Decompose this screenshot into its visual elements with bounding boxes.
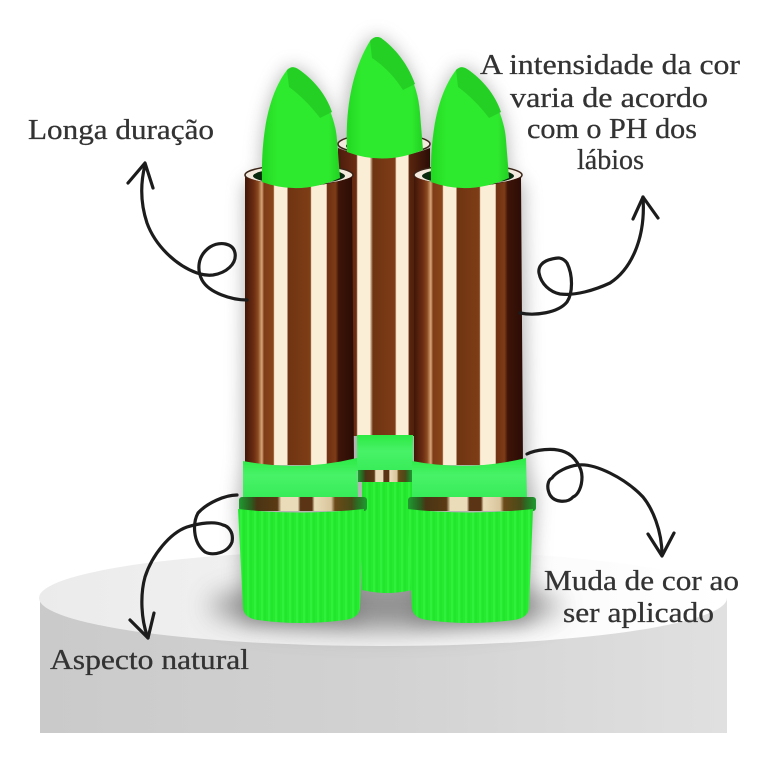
label: long lasting: Longa duração	[28, 114, 214, 146]
label: changes color	[544, 565, 739, 629]
shadow under lipsticks	[210, 37, 560, 630]
lipstick: right	[407, 67, 536, 623]
label: color intensity: varia de acordo	[510, 82, 708, 114]
arrow: color intensity	[520, 197, 658, 314]
label: changes color: Muda de cor ao	[544, 565, 739, 597]
arrow: changes color	[527, 449, 674, 556]
label: color intensity: lábios	[577, 144, 644, 176]
label: changes color: ser aplicado	[563, 597, 714, 629]
arrow: natural look	[130, 495, 237, 638]
pedestal	[39, 550, 727, 733]
label: color intensity: com o PH dos	[527, 113, 697, 145]
lipstick: left	[238, 67, 367, 623]
arrow: long lasting	[128, 163, 247, 300]
lipstick: center	[338, 37, 430, 593]
label: natural look: Aspecto natural	[50, 644, 249, 676]
label: color intensity: A intensidade da cor	[480, 49, 740, 81]
label: color intensity	[480, 49, 740, 176]
